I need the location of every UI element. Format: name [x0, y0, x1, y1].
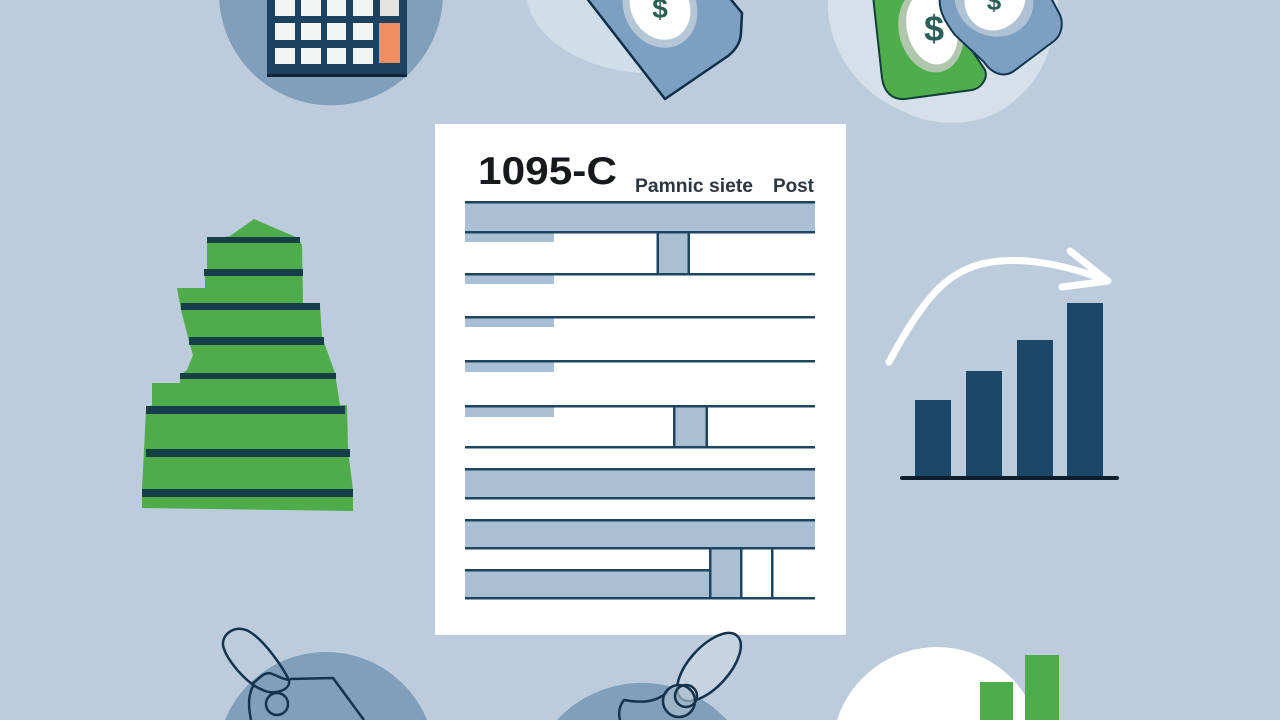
form header labels: Post [773, 176, 815, 197]
icon: green and blue money tags: $ [924, 8, 944, 49]
icon: green and blue money tags [828, 0, 1062, 123]
form rows [465, 201, 815, 600]
icon: green stepped stack [142, 219, 353, 511]
icon: tag in circle, bottom middle [557, 622, 752, 720]
chart: rising bars with arrow [889, 251, 1119, 480]
icon: calculator in circle [219, 0, 443, 105]
icon: price tag with dollar sign [527, 0, 742, 99]
icon: green bars in white circle, bottom right [837, 647, 1059, 720]
panel: 1095-C form document [435, 124, 846, 635]
form title: 1095-C [478, 150, 617, 193]
form header labels [635, 176, 815, 197]
form header labels: Pamnic siete [635, 176, 753, 197]
bars [915, 303, 1103, 476]
icon: tag in circle, bottom left [223, 629, 427, 720]
arrow [889, 251, 1108, 362]
